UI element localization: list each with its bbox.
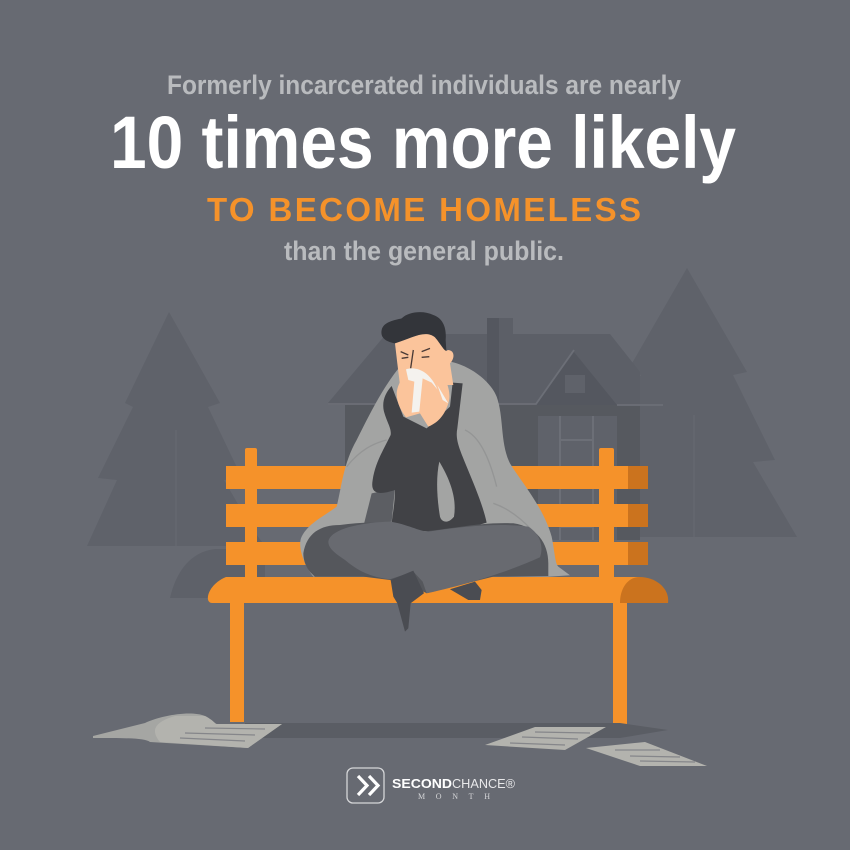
- logo: MONTH: [418, 792, 490, 801]
- bench: [208, 448, 668, 728]
- face and neck: [395, 334, 453, 385]
- logo wordmark: SECOND: [392, 776, 452, 791]
- headline: 10 times more likely: [110, 101, 736, 184]
- facial lines: [401, 348, 430, 368]
- trousers: [303, 523, 548, 593]
- trouser highlight: [328, 522, 541, 593]
- man on bench: [300, 312, 570, 632]
- feet: [391, 571, 482, 632]
- newspaper sheet: centre: [485, 727, 606, 750]
- newspaper sheet: right: [586, 742, 707, 766]
- hands: [397, 375, 449, 427]
- bench seat: [208, 577, 668, 603]
- intro text: Formerly incarcerated individuals are nearly: [167, 70, 681, 100]
- newspaper: left: [93, 714, 282, 748]
- bench back posts: [245, 448, 614, 580]
- blanket: [300, 362, 570, 577]
- logo icon: [347, 768, 384, 803]
- sweater: [372, 383, 487, 531]
- logo: CHANCE®: [452, 776, 515, 791]
- background: house: [328, 318, 663, 540]
- closing text: than the general public.: [284, 236, 564, 266]
- bench back slats: [226, 466, 648, 565]
- subheading: TO BECOME HOMELESS: [207, 191, 641, 228]
- grey backing behind arm: [363, 488, 395, 527]
- background: right tree: [617, 268, 797, 537]
- bench legs: [230, 600, 627, 728]
- ground shadow: [245, 723, 668, 738]
- blanket folds: [347, 430, 540, 540]
- background: left tree: [87, 312, 265, 546]
- tissue: [406, 368, 448, 413]
- blanket inner panel: [437, 462, 455, 522]
- background: bench shadow: [170, 549, 265, 598]
- logo: [347, 768, 515, 803]
- hair: [381, 312, 447, 355]
